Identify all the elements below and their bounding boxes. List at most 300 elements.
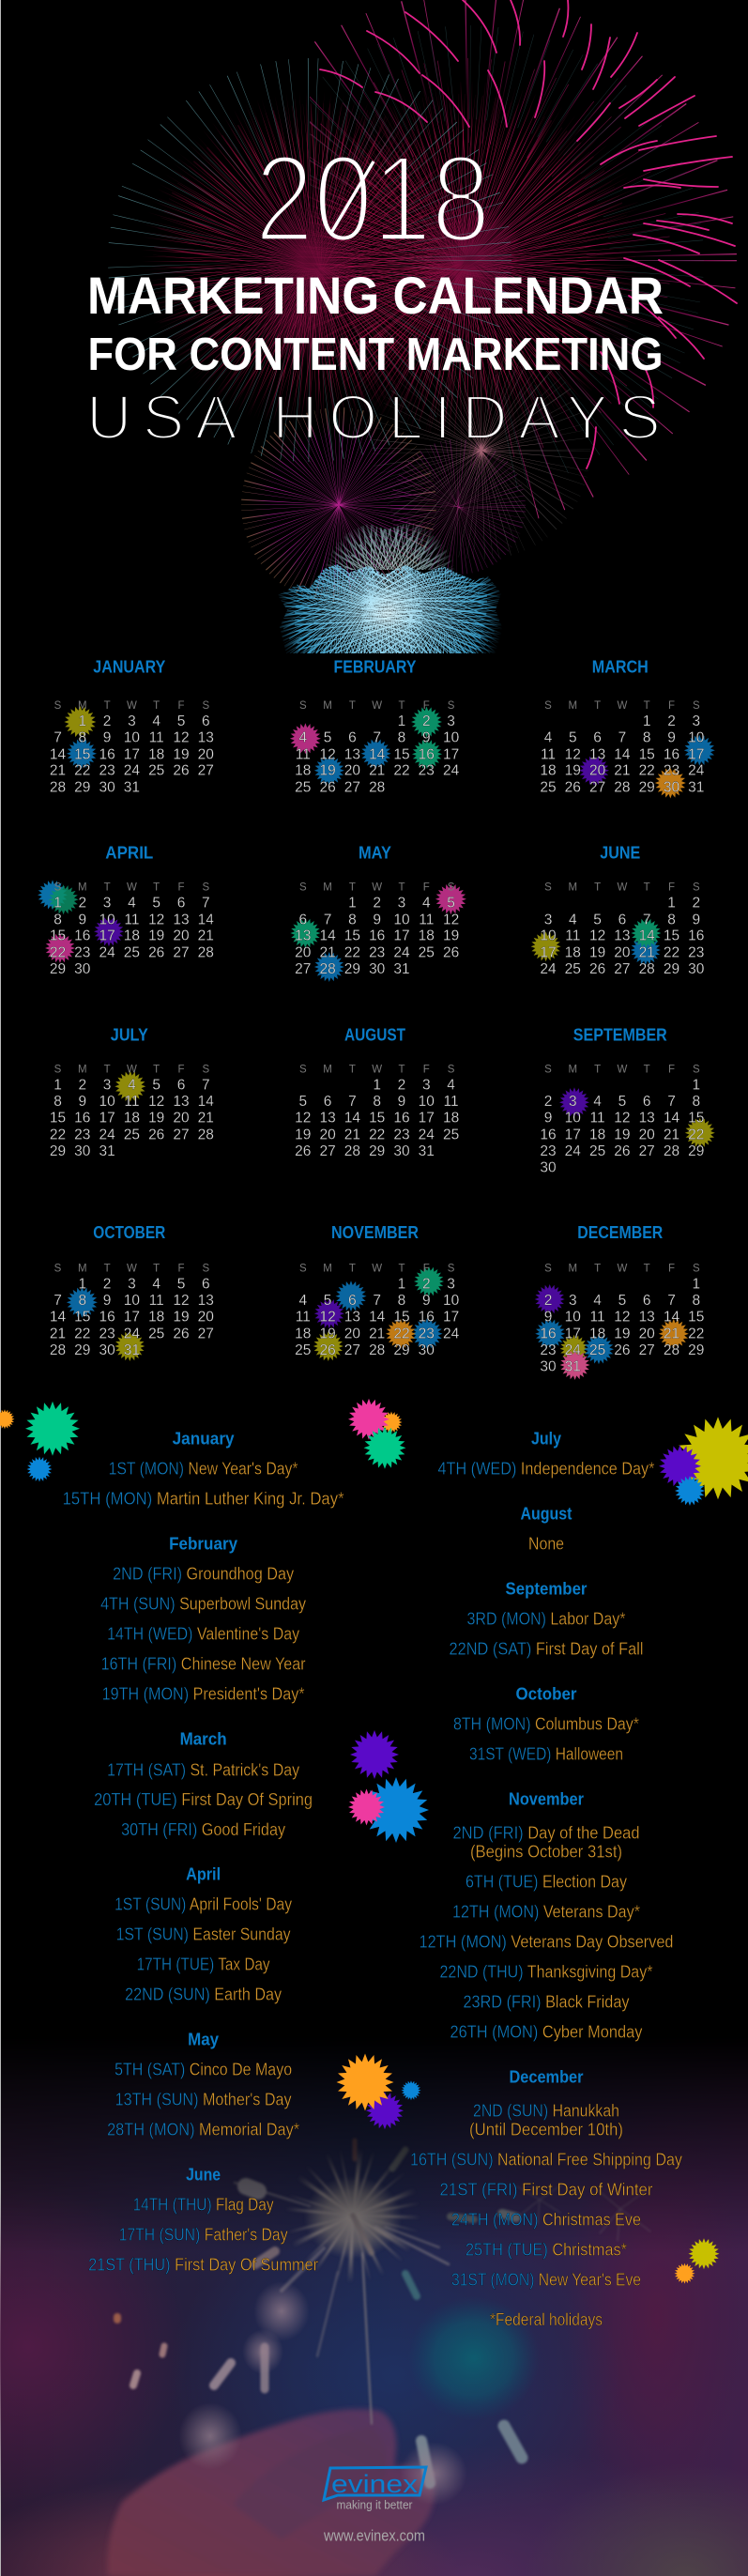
calendar: April: 11	[124, 912, 139, 928]
calendar: July: 6	[177, 1077, 185, 1093]
calendar: January: JANUARY	[93, 658, 165, 677]
item: 19TH (MON) President's Day*	[102, 1685, 305, 1704]
calendar: November: 21	[369, 1326, 385, 1342]
calendar: July: 15	[50, 1111, 66, 1127]
calendar: November: 23	[419, 1326, 435, 1342]
calendar: January: 15	[74, 746, 90, 762]
calendar: July: 30	[74, 1143, 91, 1159]
calendar: February: 18	[295, 763, 311, 779]
calendar: April: M	[78, 882, 87, 894]
calendar: January: W	[127, 700, 137, 712]
calendar: November: 11	[296, 1310, 311, 1326]
calendar: September: 22	[688, 1127, 704, 1142]
starburst cluster: middle	[348, 1730, 429, 1843]
calendar: December: S	[544, 1263, 552, 1274]
calendar: February: 6	[348, 730, 357, 746]
calendar: December: 30	[540, 1359, 557, 1375]
item: 8TH (MON) Columbus Day*	[453, 1715, 639, 1734]
item: 2ND (SUN) Hanukkah	[473, 2102, 619, 2121]
calendar: January: 23	[99, 763, 115, 779]
calendar: September: 25	[589, 1143, 605, 1159]
calendar: October: 5	[177, 1276, 185, 1292]
starburst cluster: lower right	[674, 2238, 719, 2284]
item: 20TH (TUE) First Day Of Spring	[94, 1790, 313, 1809]
calendar: February: 11	[296, 746, 311, 762]
calendar: February: 9	[422, 730, 431, 746]
calendar: June: 24	[540, 961, 557, 977]
calendar: February: 4	[298, 730, 307, 746]
calendar: July: 9	[78, 1094, 86, 1110]
calendar: July: 16	[74, 1111, 90, 1127]
calendar: April: 23	[74, 944, 90, 960]
calendar: February: 8	[398, 730, 405, 746]
calendar: December: 28	[664, 1342, 679, 1358]
calendar: March: 17	[688, 746, 704, 762]
calendar: May: 11	[419, 912, 434, 928]
starburst cluster: top left	[0, 1402, 80, 1481]
calendar: February: 1	[398, 713, 405, 729]
calendar: May: 7	[324, 912, 331, 928]
calendar: August: M	[323, 1064, 332, 1075]
calendar: August: 11	[444, 1094, 459, 1110]
calendar: September	[540, 1025, 715, 1176]
calendar: January: 31	[124, 779, 140, 795]
calendar: December: 24	[565, 1342, 581, 1358]
calendar: June: 23	[688, 944, 704, 960]
heading: May: May	[188, 2030, 219, 2048]
calendar: November: 25	[295, 1342, 311, 1358]
calendar: December: 8	[692, 1293, 700, 1309]
calendar: January: T	[153, 700, 160, 712]
calendar: December: 9	[544, 1310, 552, 1326]
calendar: June: 8	[667, 912, 676, 928]
calendar: November: 7	[373, 1293, 381, 1309]
calendar: September: 2	[544, 1094, 552, 1110]
calendar: April: 16	[74, 928, 90, 944]
calendar: August: 1	[373, 1077, 381, 1093]
calendar: October: 11	[149, 1293, 164, 1309]
calendar: February: 19	[319, 763, 336, 779]
panel: holiday list, right column	[410, 1429, 682, 2329]
calendar: January: 13	[198, 730, 214, 746]
calendar: July	[50, 1025, 214, 1159]
date markers: April	[38, 880, 124, 963]
calendar: November: 26	[319, 1342, 336, 1358]
item: 3RD (MON) Labor Day*	[467, 1610, 625, 1629]
calendar: April: 14	[198, 912, 214, 928]
calendar: January: 6	[202, 713, 210, 729]
calendar: September: 14	[664, 1111, 679, 1127]
calendar: July: 19	[148, 1111, 164, 1127]
calendar: August: T	[398, 1064, 405, 1075]
calendar: October: 18	[148, 1310, 164, 1326]
calendar: December: 31	[565, 1359, 581, 1375]
calendar: October: 19	[173, 1310, 190, 1326]
calendar: November: 17	[443, 1310, 459, 1326]
calendar: April: 19	[148, 928, 164, 944]
item: 6TH (TUE) Election Day	[466, 1873, 627, 1892]
calendar: March: 10	[688, 730, 705, 746]
calendar: May: 12	[443, 912, 459, 928]
calendar: October: 14	[50, 1310, 66, 1326]
title: year	[263, 158, 484, 240]
firework: small magenta burst	[424, 473, 492, 541]
calendar: June: W	[617, 882, 627, 894]
calendar: February: 10	[443, 730, 460, 746]
calendar: August: AUGUST	[344, 1025, 405, 1044]
calendar: March: 14	[614, 746, 631, 762]
calendar: March: 6	[593, 730, 602, 746]
website address: www.evinex.com	[323, 2527, 425, 2545]
calendar: March: 19	[565, 763, 581, 779]
calendar: April: 15	[50, 928, 66, 944]
calendar: February: 2	[422, 713, 431, 729]
calendar: April: 2	[78, 896, 86, 912]
calendar: March: 4	[544, 730, 553, 746]
calendar: July: 25	[124, 1127, 140, 1142]
calendar: September: 24	[565, 1143, 581, 1159]
calendar: October: 26	[173, 1326, 190, 1342]
item: 17TH (SAT) St. Patrick's Day	[107, 1760, 299, 1779]
calendar: February: S	[448, 700, 455, 712]
date markers: July	[114, 1071, 145, 1102]
calendar: June: 16	[688, 928, 704, 944]
heading: August: August	[520, 1504, 572, 1523]
calendar: June: 4	[569, 912, 577, 928]
calendar: March: 13	[589, 746, 605, 762]
calendar: July: 18	[124, 1111, 140, 1127]
calendar: June: T	[644, 882, 650, 894]
calendar: December: 29	[688, 1342, 704, 1358]
firework: big magenta burst	[267, 0, 737, 468]
calendar: July: S	[54, 1064, 62, 1075]
calendar: June: 7	[643, 912, 651, 928]
panel: holiday list, left column	[63, 1429, 344, 2275]
calendar: January: 1	[78, 713, 86, 729]
calendar: April: 25	[124, 944, 140, 960]
calendar: October: W	[127, 1263, 137, 1274]
calendar: August: 19	[295, 1127, 311, 1142]
item: 12TH (MON) Veterans Day Observed	[419, 1933, 674, 1952]
calendar: May: S	[299, 882, 307, 894]
calendar: December: W	[617, 1263, 627, 1274]
heading: December: December	[509, 2067, 584, 2086]
calendar: September: 19	[614, 1127, 631, 1142]
date markers: November	[313, 1266, 444, 1361]
calendar: October: S	[54, 1263, 62, 1274]
calendar: September: T	[594, 1064, 601, 1075]
calendar: December: 17	[565, 1326, 581, 1342]
calendar: November: F	[423, 1263, 430, 1274]
calendar: February: 17	[443, 746, 459, 762]
calendar: October: 6	[202, 1276, 210, 1292]
calendar: August: 13	[319, 1111, 336, 1127]
calendar: December: M	[569, 1263, 577, 1274]
calendar: October: 27	[198, 1326, 214, 1342]
calendar: October: 25	[148, 1326, 164, 1342]
calendar: December: 4	[593, 1293, 602, 1309]
date markers: December	[535, 1284, 689, 1380]
calendar: May: 1	[348, 896, 357, 912]
calendar: November	[295, 1223, 460, 1361]
calendar: August: 28	[344, 1143, 360, 1159]
calendar: September: M	[569, 1064, 577, 1075]
calendar: April: 26	[148, 944, 164, 960]
calendar: April: 12	[148, 912, 164, 928]
calendar: June: 9	[692, 912, 700, 928]
calendar: August: 23	[393, 1127, 410, 1142]
date markers: October	[67, 1287, 145, 1361]
calendar: October: 4	[152, 1276, 160, 1292]
calendar: April: 28	[198, 944, 214, 960]
calendar: November: 15	[393, 1310, 410, 1326]
calendar: June: S	[693, 882, 700, 894]
item: 15TH (MON) Martin Luther King Jr. Day*	[63, 1490, 344, 1509]
calendar: February: 22	[393, 763, 410, 779]
calendar: May: W	[372, 882, 382, 894]
calendar: January: 27	[198, 763, 214, 779]
calendar: August: 7	[348, 1094, 357, 1110]
calendar: September: 5	[618, 1094, 626, 1110]
calendar: July: 8	[53, 1094, 62, 1110]
calendar: April: W	[127, 882, 137, 894]
calendar: June: 19	[589, 944, 605, 960]
title: line one: MARKETING CALENDAR	[87, 266, 664, 325]
calendar: December: DECEMBER	[577, 1223, 663, 1242]
calendar: May: 20	[295, 944, 312, 960]
calendar: July: 2	[78, 1077, 86, 1093]
calendar: January: 21	[50, 763, 66, 779]
item: 31ST (MON) New Year's Eve	[451, 2271, 641, 2290]
calendar: April: S	[54, 882, 62, 894]
calendar: October: 1	[78, 1276, 86, 1292]
calendar: April: F	[177, 882, 185, 894]
item: 21ST (THU) First Day Of Summer	[88, 2256, 318, 2275]
calendar: March: 7	[618, 730, 626, 746]
item: 21ST (FRI) First Day of Winter	[439, 2181, 653, 2200]
title: year: 2018	[255, 130, 490, 268]
calendar: December: 14	[664, 1310, 679, 1326]
date markers: January	[64, 706, 97, 769]
calendar: December: 22	[688, 1326, 704, 1342]
calendar: August	[295, 1025, 459, 1159]
calendar: June: 27	[614, 961, 631, 977]
calendar: June: 5	[593, 912, 602, 928]
calendar: May: 16	[369, 928, 385, 944]
calendar: February: 24	[443, 763, 460, 779]
calendar: November: NOVEMBER	[331, 1223, 419, 1242]
calendar: May: 22	[344, 944, 360, 960]
calendar: November: 24	[443, 1326, 460, 1342]
calendar: March: 26	[565, 779, 581, 795]
calendar: March: 8	[643, 730, 651, 746]
item: 13TH (SUN) Mother's Day	[115, 2091, 292, 2109]
calendar: January: 18	[148, 746, 164, 762]
calendar: January: 11	[149, 730, 164, 746]
calendar: July: F	[177, 1064, 185, 1075]
calendar: February: 5	[324, 730, 331, 746]
calendar: April: 29	[50, 961, 66, 977]
calendar: June: 26	[589, 961, 605, 977]
calendar: October: M	[78, 1263, 87, 1274]
calendar: August: 6	[324, 1094, 331, 1110]
item: 4TH (WED) Independence Day*	[437, 1460, 655, 1479]
calendar: July: W	[127, 1064, 137, 1075]
heading: June: June	[186, 2165, 221, 2184]
main title	[90, 158, 663, 437]
calendar: January: 17	[124, 746, 140, 762]
calendar: February: 20	[344, 763, 360, 779]
calendar: September: S	[544, 1064, 552, 1075]
firework: small purple burst	[290, 456, 388, 554]
item: 16TH (SUN) National Free Shipping Day	[410, 2151, 682, 2170]
calendar: November: M	[323, 1263, 332, 1274]
calendar: July: 5	[152, 1077, 160, 1093]
calendar: January: S	[54, 700, 62, 712]
calendar: December: 7	[667, 1293, 676, 1309]
calendar: June: 18	[565, 944, 581, 960]
calendar: July: 23	[74, 1127, 90, 1142]
calendar: August: 8	[373, 1094, 381, 1110]
calendar: July: 13	[173, 1094, 190, 1110]
date markers: February	[290, 706, 442, 786]
calendar: May: 21	[319, 944, 336, 960]
calendar: November: 29	[393, 1342, 410, 1358]
calendar: June: 14	[639, 928, 655, 944]
calendar: December: 15	[688, 1310, 704, 1326]
calendar: October: T	[153, 1263, 160, 1274]
calendar: July: 29	[50, 1143, 66, 1159]
calendar: May: 23	[369, 944, 385, 960]
calendar: November: 28	[369, 1342, 385, 1358]
calendar: May: 24	[393, 944, 410, 960]
calendar: July: M	[78, 1064, 87, 1075]
calendar: June: 12	[589, 928, 605, 944]
calendar: October: 2	[103, 1276, 111, 1292]
calendar: July: 27	[173, 1127, 190, 1142]
calendar: March: 24	[688, 763, 705, 779]
calendar: December: 27	[639, 1342, 655, 1358]
calendar: December: 6	[643, 1293, 651, 1309]
calendar: April: T	[104, 882, 111, 894]
calendar: April: 6	[177, 896, 185, 912]
calendar: December: T	[594, 1263, 601, 1274]
calendar: March	[540, 658, 715, 798]
calendar: May: T	[349, 882, 356, 894]
tagline: making it better	[336, 2498, 413, 2512]
calendar: December: 3	[569, 1293, 577, 1309]
item: 24TH (MON) Christmas Eve	[451, 2211, 641, 2230]
calendar: November: T	[398, 1263, 405, 1274]
calendar: May: 2	[373, 896, 381, 912]
calendar: September: 16	[540, 1127, 557, 1142]
calendar: July: 24	[99, 1127, 115, 1142]
calendar: September: 23	[540, 1143, 557, 1159]
calendar: March: 9	[667, 730, 676, 746]
calendar: July: 26	[148, 1127, 164, 1142]
calendar: November: 1	[398, 1276, 405, 1292]
calendar: August: 24	[419, 1127, 435, 1142]
calendar: June: JUNE	[600, 843, 640, 862]
calendar: January: 10	[124, 730, 140, 746]
calendar: September: 10	[565, 1111, 581, 1127]
calendar: December: 26	[614, 1342, 631, 1358]
calendar: October: 3	[128, 1276, 136, 1292]
calendar: August: 14	[344, 1111, 360, 1127]
title: line three: USA HOLIDAYS	[86, 383, 661, 453]
calendar: August: 27	[319, 1143, 336, 1159]
calendar: June: 17	[540, 944, 557, 960]
calendar: September: 6	[643, 1094, 651, 1110]
calendar: April: 7	[202, 896, 210, 912]
calendar: November: 4	[298, 1293, 307, 1309]
calendar: December: 19	[614, 1326, 631, 1342]
item: 4TH (SUN) Superbowl Sunday	[100, 1595, 306, 1614]
heading: October: October	[516, 1684, 576, 1703]
calendar: November: 22	[393, 1326, 410, 1342]
calendar: July: T	[153, 1064, 160, 1075]
calendar: January: 25	[148, 763, 164, 779]
item: 22ND (SUN) Earth Day	[125, 1986, 282, 2004]
background photo: hand holding sparkler	[0, 2062, 748, 2576]
calendar: September: SEPTEMBER	[573, 1025, 667, 1044]
calendar: January: 2	[103, 713, 111, 729]
calendar: August: S	[299, 1064, 307, 1075]
item: 1ST (MON) New Year's Day*	[109, 1460, 298, 1479]
calendar: September: 15	[688, 1111, 704, 1127]
calendar: January: 30	[99, 779, 115, 795]
calendar: April: 3	[103, 896, 111, 912]
calendar: March: F	[668, 700, 675, 712]
calendar: February: 12	[319, 746, 336, 762]
calendar: November: 3	[447, 1276, 455, 1292]
calendar: March: 3	[692, 713, 700, 729]
calendar: November: 30	[419, 1342, 435, 1358]
logo: evinex: evinex	[331, 2470, 419, 2498]
calendar: March: 1	[643, 713, 651, 729]
calendar: April: APRIL	[105, 843, 153, 862]
calendar: December: 18	[589, 1326, 605, 1342]
calendar: June: 1	[667, 896, 676, 912]
calendar: October: 31	[124, 1342, 140, 1358]
hand	[108, 2409, 435, 2576]
calendar: April: 30	[74, 961, 91, 977]
calendar: May: 19	[443, 928, 459, 944]
calendar: April: 4	[128, 896, 136, 912]
calendar: July: 21	[198, 1111, 214, 1127]
calendar: August: T	[349, 1064, 356, 1075]
calendar: May: 3	[398, 896, 405, 912]
calendar: February: 26	[319, 779, 336, 795]
calendar: May	[290, 843, 466, 982]
firework: pale grey burst	[427, 396, 536, 505]
item: 1ST (SUN) April Fools' Day	[114, 1895, 292, 1914]
calendar: October: 12	[173, 1293, 190, 1309]
calendar: November: S	[299, 1263, 307, 1274]
calendar: January: 19	[173, 746, 190, 762]
calendar: June: 6	[618, 912, 626, 928]
calendar: May: 6	[298, 912, 307, 928]
calendar: June: 2	[692, 896, 700, 912]
starburst cluster: top centre	[348, 1399, 405, 1469]
calendar: March: T	[594, 700, 601, 712]
calendar: October: 23	[99, 1326, 115, 1342]
calendar: May: 27	[295, 961, 311, 977]
footnote: *Federal holidays	[490, 2310, 603, 2329]
calendar: March: MARCH	[592, 658, 649, 677]
calendar: June: 30	[688, 961, 705, 977]
calendar: March: 18	[540, 763, 557, 779]
